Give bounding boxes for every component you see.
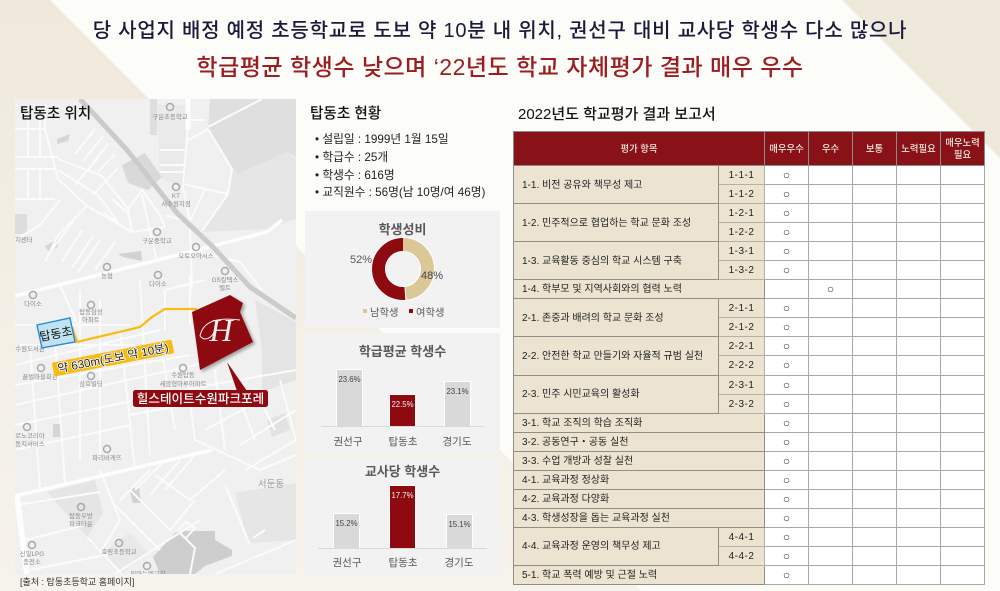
evaluation table: ○ bbox=[783, 378, 790, 392]
evaluation table: ○ bbox=[783, 473, 790, 487]
evaluation table: 2-2-2 bbox=[729, 360, 754, 371]
map labels: 충전소 bbox=[23, 557, 41, 566]
evaluation table: 우수 bbox=[822, 142, 839, 154]
school facts list: • 교직원수 : 56명(남 10명/여 46명) bbox=[315, 186, 485, 199]
map place dots bbox=[24, 104, 228, 570]
main roads bbox=[15, 99, 282, 574]
map labels: 호림초등학교 bbox=[101, 547, 137, 556]
map labels: 구운중학교 bbox=[142, 236, 172, 245]
evaluation table: ○ bbox=[783, 263, 790, 277]
evaluation table: ○ bbox=[783, 187, 790, 201]
axis label: 경기도 bbox=[444, 557, 473, 569]
map labels: 오토오아시스 bbox=[178, 251, 214, 260]
evaluation table: 노력필요 bbox=[901, 142, 936, 154]
evaluation table: ○ bbox=[783, 530, 790, 544]
title bbox=[93, 20, 907, 80]
evaluation table: 1-3-2 bbox=[729, 265, 754, 276]
map labels bbox=[15, 112, 284, 578]
evaluation table: 4-1. 교육과정 정상화 bbox=[522, 475, 609, 486]
evaluation table: 1-1-2 bbox=[729, 189, 754, 200]
evaluation table: ○ bbox=[783, 225, 790, 239]
evaluation table: 2-3. 민주 시민교육의 활성화 bbox=[522, 389, 640, 400]
evaluation table: 2-1. 존중과 배려의 학교 문화 조성 bbox=[522, 313, 664, 324]
evaluation table: ○ bbox=[783, 568, 790, 582]
donut chart: 48% bbox=[421, 270, 443, 282]
evaluation table: ○ bbox=[783, 511, 790, 525]
evaluation table: ○ bbox=[783, 320, 790, 334]
evaluation table: 평가 항목 bbox=[620, 142, 658, 154]
bar: 권선구 bbox=[333, 513, 360, 548]
evaluation table: ○ bbox=[783, 416, 790, 430]
evaluation table: ○ bbox=[783, 339, 790, 353]
evaluation table: 필요 bbox=[954, 148, 971, 160]
donut chart: 여학생 bbox=[416, 307, 444, 319]
evaluation table: ○ bbox=[783, 549, 790, 563]
bar: 탑동초: 22.5% bbox=[391, 400, 414, 409]
evaluation table: ○ bbox=[783, 206, 790, 220]
bar: 경기도 bbox=[446, 514, 473, 548]
school facts list bbox=[315, 132, 485, 199]
evaluation table: 3-1. 학교 조직의 학습 조직화 bbox=[522, 418, 642, 429]
evaluation table: ○ bbox=[783, 244, 790, 258]
evaluation table: 4-4. 교육과정 운영의 책무성 제고 bbox=[522, 541, 661, 552]
map labels: 지센터 bbox=[15, 235, 33, 244]
school facts list: • 학생수 : 616명 bbox=[315, 169, 395, 182]
map labels: 신일LPG bbox=[20, 549, 44, 558]
evaluation table bbox=[513, 131, 985, 585]
evaluation table: 매우노력 bbox=[945, 136, 980, 148]
map labels: 다이소 bbox=[149, 279, 167, 288]
report heading: 2022년도 학교평가 결과 보고서 bbox=[518, 106, 716, 123]
school facts list: • 학급수 : 25개 bbox=[315, 151, 388, 164]
map base areas bbox=[15, 99, 296, 574]
school status heading: 탑동초 현황 bbox=[310, 106, 381, 122]
map labels: 수원도서관 bbox=[15, 344, 45, 353]
title line 2: 학급평균 학생수 낮으며 ‘22년도 학교 자체평가 결과 매우 우수 bbox=[196, 54, 804, 80]
bar: 권선구: 23.6% bbox=[338, 375, 361, 384]
donut chart: 남학생 bbox=[370, 307, 398, 319]
map labels: 탑동삼성 bbox=[79, 307, 103, 316]
evaluation table: 4-2. 교육과정 다양화 bbox=[522, 494, 609, 505]
map labels: 탑동우방 bbox=[69, 511, 93, 520]
evaluation table: 3-3. 수업 개방과 성찰 실천 bbox=[522, 456, 633, 467]
panel: map bbox=[15, 99, 296, 574]
bar: 탑동초: 17.7% bbox=[391, 491, 414, 500]
axis label: 권선구 bbox=[334, 436, 362, 448]
evaluation table: ○ bbox=[827, 282, 834, 296]
map labels: 파크타운 bbox=[69, 519, 93, 528]
evaluation table: 2-2-1 bbox=[729, 341, 754, 352]
site marker bbox=[192, 295, 253, 370]
evaluation table: 1-3. 교육활동 중심의 학교 시스템 구축 bbox=[522, 256, 682, 267]
bar: 권선구: 15.2% bbox=[335, 519, 358, 528]
evaluation table: ○ bbox=[783, 435, 790, 449]
evaluation table: 4-3. 학생성장을 돕는 교육과정 실천 bbox=[522, 513, 670, 524]
map labels: 세암형마루아파트 bbox=[159, 379, 207, 388]
bar: 경기도: 15.1% bbox=[448, 520, 471, 529]
axis label: 권선구 bbox=[332, 557, 361, 569]
evaluation table: 1-2-1 bbox=[729, 208, 754, 219]
map heading: 탑동초 위치 bbox=[20, 106, 91, 122]
map labels: KT bbox=[172, 193, 180, 200]
map labels: 삼호빌딩 bbox=[79, 379, 103, 388]
map labels: 아파트 bbox=[82, 315, 100, 324]
site marker: H bbox=[208, 312, 234, 348]
source note: [출처 : 탑동초등학교 홈페이지] bbox=[20, 577, 134, 587]
axis label: 탑동초 bbox=[388, 436, 417, 448]
panel: gender ratio bbox=[305, 211, 500, 328]
school facts list: • 설립일 : 1999년 1월 15일 bbox=[315, 133, 449, 146]
evaluation table: 1-2-2 bbox=[729, 227, 754, 238]
evaluation table: ○ bbox=[783, 358, 790, 372]
evaluation table: 2-3-1 bbox=[729, 380, 754, 391]
panel: average class size bbox=[305, 333, 500, 452]
map labels: 벨트 bbox=[219, 284, 231, 292]
bar: 경기도 bbox=[444, 381, 471, 426]
highway bbox=[80, 99, 296, 318]
map labels: 구운초등학교 bbox=[152, 112, 188, 121]
school marker: 탑동초 bbox=[38, 324, 74, 344]
map labels: 동지서비스 bbox=[15, 439, 45, 448]
title line 1: 당 사업지 배정 예정 초등학교로 도보 약 10분 내 위치, 권선구 대비 교사당 학생수 다소 많으나 bbox=[93, 20, 907, 42]
evaluation table: 2-3-2 bbox=[729, 399, 754, 410]
evaluation table: 2-1-1 bbox=[729, 303, 754, 314]
callout: 힐스테이트수원파크포레 bbox=[137, 391, 264, 406]
map labels: 서둔동 bbox=[258, 479, 284, 490]
evaluation table: 4-4-2 bbox=[729, 551, 754, 562]
evaluation table: ○ bbox=[783, 168, 790, 182]
heading: 교사당 학생수 bbox=[365, 464, 440, 479]
evaluation table: ○ bbox=[783, 454, 790, 468]
map labels: 다이소 bbox=[24, 299, 42, 308]
minor roads bbox=[15, 99, 296, 574]
bar: 탑동초 bbox=[389, 394, 416, 426]
map labels: 농협 bbox=[101, 271, 113, 280]
map labels: 서수원지점 bbox=[161, 199, 191, 208]
evaluation table: 5-1. 학교 폭력 예방 및 근절 노력 bbox=[522, 570, 657, 581]
evaluation table: 보통 bbox=[866, 142, 883, 154]
axis label: 탑동초 bbox=[388, 557, 417, 569]
panel: students per teacher bbox=[305, 456, 500, 575]
distance label: 약 630m(도보 약 10분) bbox=[56, 340, 170, 376]
map labels: GS칼텍스 bbox=[212, 276, 239, 284]
heading: 학생성비 bbox=[379, 222, 426, 237]
map labels: 파리바게뜨 bbox=[92, 453, 122, 462]
map labels: 르노코리아 bbox=[15, 431, 45, 440]
evaluation table: 1-4. 학부모 및 지역사회와의 협력 노력 bbox=[522, 284, 682, 295]
evaluation table: 3-2. 공동연구・공동 실천 bbox=[522, 437, 628, 448]
walking route bbox=[72, 309, 197, 342]
evaluation table: 1-1. 비전 공유와 책무성 제고 bbox=[522, 180, 642, 191]
heading: 학급평균 학생수 bbox=[359, 344, 446, 359]
evaluation table: 1-2. 민주적으로 협업하는 학교 문화 조성 bbox=[522, 218, 691, 229]
evaluation table: ○ bbox=[783, 492, 790, 506]
map labels: 꿀벌마을회관 bbox=[22, 372, 58, 381]
evaluation table: 4-4-1 bbox=[729, 532, 754, 543]
bar: 탑동초 bbox=[389, 485, 416, 548]
donut chart bbox=[350, 237, 444, 319]
evaluation table: 매우우수 bbox=[769, 142, 804, 154]
evaluation table: ○ bbox=[783, 301, 790, 315]
map labels: 수원탑동 bbox=[171, 370, 195, 379]
evaluation table: 2-1-2 bbox=[729, 322, 754, 333]
bar: 권선구 bbox=[336, 369, 363, 426]
school marker bbox=[37, 318, 75, 348]
donut chart: 52% bbox=[350, 254, 372, 266]
bar: 경기도: 23.1% bbox=[446, 387, 469, 396]
axis label: 경기도 bbox=[442, 436, 471, 448]
evaluation table: 2-2. 안전한 학교 만들기와 자율적 규범 실천 bbox=[522, 351, 703, 362]
callout bbox=[133, 362, 268, 407]
evaluation table: 1-3-1 bbox=[729, 246, 754, 257]
evaluation table: ○ bbox=[783, 397, 790, 411]
evaluation table: 1-1-1 bbox=[729, 170, 754, 181]
